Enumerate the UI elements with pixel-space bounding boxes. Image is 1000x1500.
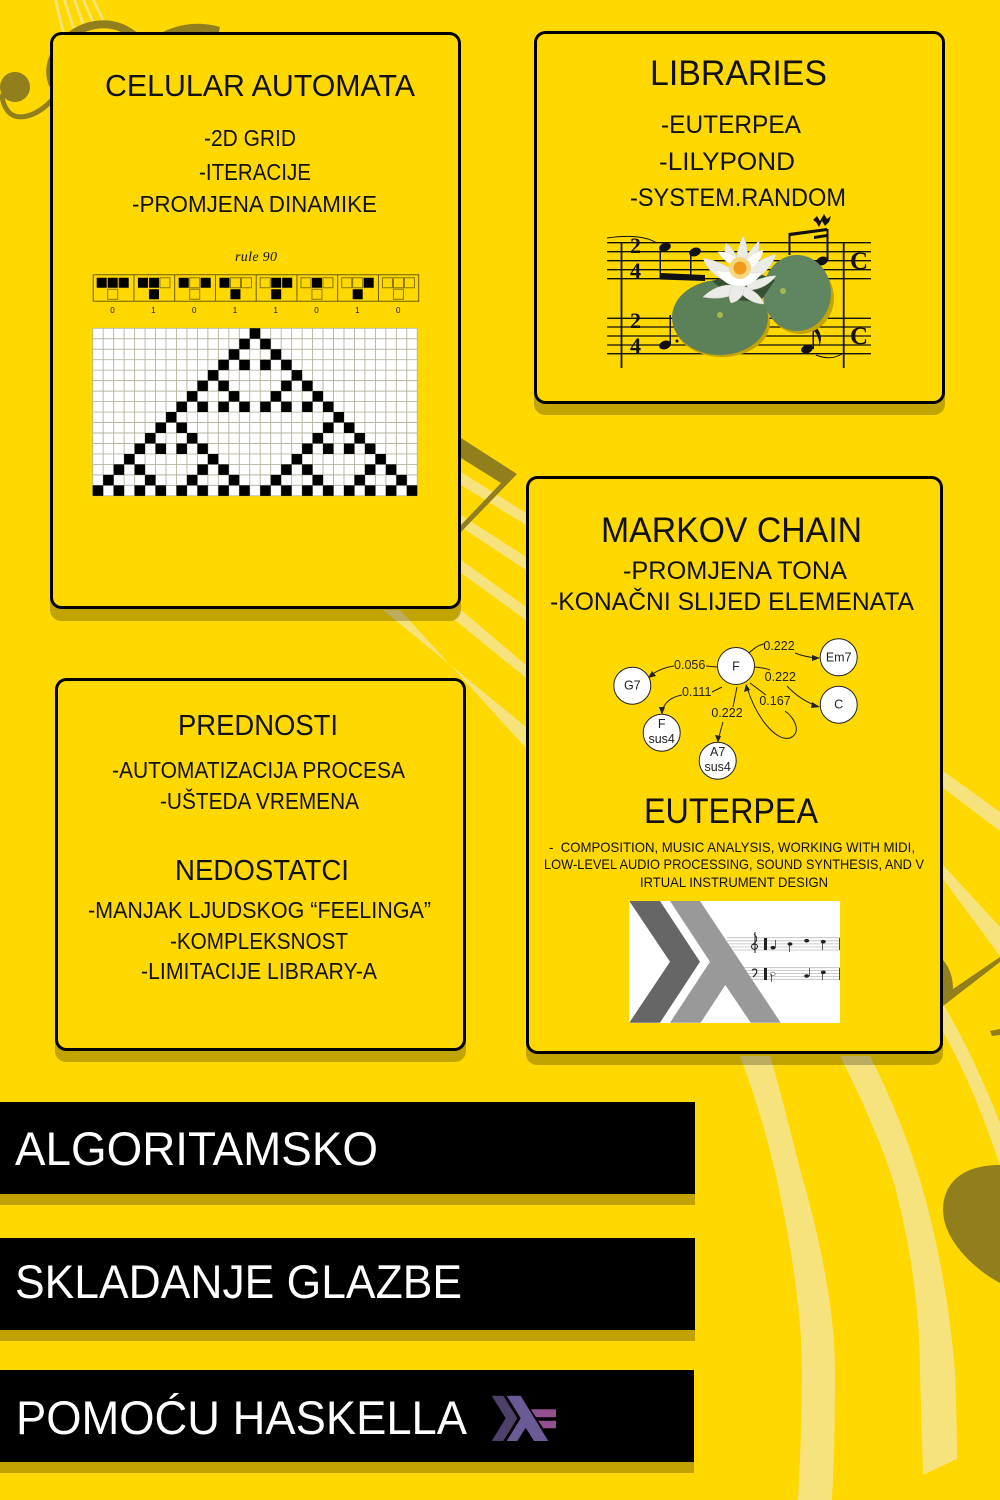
rule 90 legend [93, 275, 419, 315]
panel: markov chain and euterpea [526, 478, 943, 1065]
rule 90 legend: 0 [110, 306, 115, 315]
chart: markov state graph: A7 [710, 745, 725, 759]
text block: euterpea description: LOW-LEVEL AUDIO PROCESSING, SOUND SYNTHESIS, AND V [544, 856, 925, 872]
text block: advantages: -AUTOMATIZACIJA PROCESA [112, 757, 406, 783]
text block: library list: -LILYPOND [659, 148, 795, 176]
text block: disadvantages: -LIMITACIJE LIBRARY-A [141, 958, 378, 984]
rule 90 legend: 0 [396, 306, 401, 315]
icon: haskell logo [492, 1396, 556, 1441]
text block: disadvantages [88, 897, 431, 984]
illustration: sheet music with water lily: 4 [630, 258, 641, 283]
illustration: sheet music with water lily: 2 [630, 233, 641, 258]
panel: libraries [534, 32, 945, 415]
chart: markov state graph: F [658, 717, 666, 731]
chart: markov state graph [614, 639, 857, 779]
text block: euterpea description [544, 839, 925, 890]
heading: markov chain: MARKOV CHAIN [601, 511, 862, 550]
rule 90 legend: 1 [355, 306, 360, 315]
panel: cellular automata [50, 34, 461, 621]
chart: markov state graph: F [732, 660, 740, 674]
text block: cellular automata bullets: -2D GRID [204, 125, 296, 151]
chart label: rule 90: rule 90 [235, 250, 277, 265]
chart: markov state graph: C [834, 698, 843, 712]
panel: prednosti and nedostatci [55, 680, 466, 1062]
chart: markov state graph: 0.222 [711, 706, 743, 720]
illustration: sheet music with water lily: 4 [630, 333, 641, 358]
chart: markov state graph: 0.167 [759, 694, 791, 708]
rule 90 legend: 0 [314, 306, 319, 315]
title banner: algoritamsko: ALGORITAMSKO [15, 1122, 378, 1175]
chart: markov state graph: 0.222 [763, 639, 795, 653]
text block: advantages [112, 757, 406, 814]
text block: cellular automata bullets [132, 125, 377, 217]
illustration: sheet music with water lily: C [850, 323, 868, 350]
chart: markov state graph: sus4 [704, 760, 731, 774]
heading: prednosti: PREDNOSTI [178, 710, 338, 742]
chart: markov state graph: 0.056 [674, 658, 705, 672]
heading: euterpea: EUTERPEA [644, 792, 819, 831]
title banner: skladanje glazbe: SKLADANJE GLAZBE [15, 1255, 462, 1308]
heading: nedostatci: NEDOSTATCI [175, 855, 349, 887]
text block: euterpea description: IRTUAL INSTRUMENT DESIGN [640, 874, 828, 890]
chart: markov state graph: 0.222 [765, 670, 796, 684]
rule 90 legend: 0 [192, 306, 197, 315]
text block: disadvantages: -MANJAK LJUDSKOG “FEELINGA” [88, 897, 431, 923]
title banner: algoritamsko [0, 1102, 695, 1205]
text block: markov bullets [550, 557, 914, 616]
chart: markov state graph: Em7 [826, 650, 852, 664]
text block: markov bullets: -PROMJENA TONA [623, 557, 847, 585]
text block: library list: -SYSTEM.RANDOM [630, 184, 846, 212]
text block: disadvantages: -KOMPLEKSNOST [170, 928, 348, 954]
illustration: sheet music with water lily: 2 [630, 308, 641, 333]
title banner: pomocu haskella: POMOĆU HASKELLA [16, 1391, 468, 1444]
heading: libraries: LIBRARIES [650, 54, 827, 93]
rule 90 legend: 1 [151, 306, 156, 315]
chart: markov state graph: sus4 [648, 732, 675, 746]
title banner: skladanje glazbe [0, 1238, 695, 1341]
illustration: sheet music with water lily [607, 214, 871, 368]
illustration: euterpea logo with staff [629, 901, 840, 1023]
rule 90 legend: 1 [233, 306, 238, 315]
chart: rule 90 grid [93, 328, 417, 496]
heading: celular automata: CELULAR AUTOMATA [105, 68, 415, 103]
text block: cellular automata bullets: -ITERACIJE [199, 159, 311, 185]
chart: markov state graph: 0.111 [682, 685, 711, 699]
text block: library list [630, 111, 846, 212]
text block: euterpea description: - COMPOSITION, MUSIC ANALYSIS, WORKING WITH MIDI, [549, 839, 915, 855]
text block: cellular automata bullets: -PROMJENA DINAMIKE [132, 191, 377, 217]
rule 90 legend: 1 [273, 306, 278, 315]
text block: library list: -EUTERPEA [661, 111, 801, 139]
title banner: pomocu haskella [0, 1370, 694, 1473]
text block: advantages: -UŠTEDA VREMENA [160, 787, 360, 814]
illustration: sheet music with water lily: C [850, 248, 868, 275]
chart: markov state graph: G7 [624, 678, 641, 692]
text block: markov bullets: -KONAČNI SLIJED ELEMENATA [550, 587, 914, 616]
